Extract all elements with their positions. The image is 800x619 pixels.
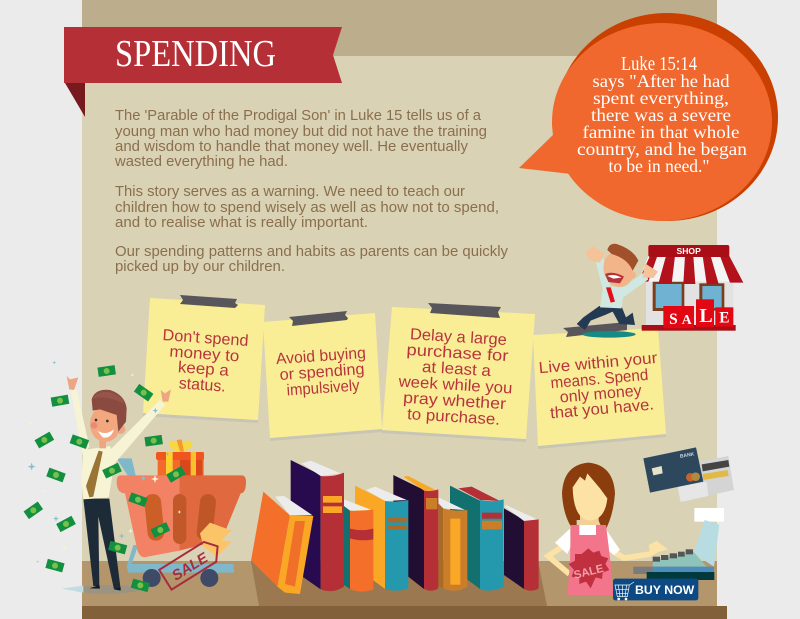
note 3 text: week while you [397, 373, 513, 397]
running man [577, 244, 658, 338]
note 3 text: at least a [422, 359, 492, 380]
note 4 text: that you have. [550, 396, 655, 422]
note 1 text: status. [178, 375, 226, 396]
note 4 text: Live within your [538, 350, 659, 377]
note 3 text: to purchase. [407, 406, 500, 429]
book: yellow and blue [355, 486, 408, 591]
shopping cart [117, 439, 246, 590]
sticky note 4 [533, 322, 666, 449]
text block: introduction: The 'Parable of the Prodigal Son' in Luke 15 tells us of a [115, 107, 482, 124]
credit cards: BANK [680, 451, 695, 460]
book: teal and orange [344, 499, 373, 592]
title: SPENDING [115, 33, 276, 75]
sale tag [159, 537, 224, 590]
verse text: to be in need." [608, 156, 710, 176]
sticky note 2 [263, 311, 382, 441]
text block: introduction: and wisdom to handle that money well. He eventually [115, 138, 468, 155]
verse text: famine in that whole [582, 122, 740, 142]
callout: Luke 15:14 speech bubble [519, 13, 778, 221]
book: navy and red [291, 460, 344, 591]
text block: introduction: and to realise what is really important. [115, 214, 368, 231]
text block: introduction: Our spending patterns and habits as parents can be quickly [115, 243, 508, 260]
shop: L [699, 305, 713, 327]
note 2 text [275, 345, 369, 400]
verse text: country, and he began [577, 139, 747, 159]
illustration: happy man with shopping cart [24, 361, 246, 594]
note 3 text [395, 326, 516, 429]
note 2 text: or spending [279, 361, 365, 384]
verse text: there was a severe [591, 105, 731, 125]
falling money [24, 365, 186, 592]
text block: introduction [114, 107, 508, 275]
note 2 text: Avoid buying [275, 345, 366, 368]
sparkles [28, 361, 181, 563]
note 1 text: keep a [177, 359, 229, 380]
buy now button [613, 579, 698, 600]
illustration: shop with running man [577, 244, 743, 338]
note 1 text: money to [169, 344, 240, 365]
text block: introduction: This story serves as a warning. We need to teach our [115, 183, 465, 200]
book: dark and red [393, 475, 438, 591]
book: teal and blue [450, 486, 504, 591]
buy now button: BUY NOW [635, 583, 695, 597]
shop: SHOP [676, 247, 702, 256]
cash register [633, 508, 724, 580]
note 4 text [538, 350, 663, 423]
book: dark and red small [504, 505, 539, 591]
note 4 text: only money [559, 382, 642, 407]
sticky note 1 [143, 295, 265, 423]
text block: introduction: children how to spend wisely as well as how not to spend, [115, 199, 499, 216]
text block: introduction: wasted everything he had. [114, 153, 288, 170]
shop [638, 245, 743, 331]
text block: introduction: young man who had money but did not have the training [115, 123, 487, 140]
book: leaning orange [251, 492, 313, 594]
note 3 text: purchase for [406, 342, 510, 365]
sale tag: SALE [169, 550, 212, 585]
note 3 text: pray whether [403, 390, 507, 413]
shop: S [669, 311, 678, 328]
man [62, 376, 171, 594]
verse text [577, 53, 747, 176]
note 2 text: impulsively [286, 377, 360, 399]
cashier [548, 463, 668, 595]
sticky note 3 [382, 303, 535, 442]
verse text: says "After he had [592, 71, 730, 91]
shop: A [682, 313, 692, 328]
verse text: spent everything, [593, 88, 729, 108]
note 1 text: Don't spend [162, 327, 249, 350]
illustration: cashier and register [548, 447, 734, 600]
shop: E [719, 310, 729, 327]
note 1 text [159, 327, 249, 397]
illustration: row of books [251, 460, 539, 594]
text block: introduction: picked up by our children. [115, 258, 285, 275]
cashier: SALE [573, 563, 605, 582]
note 4 text: means. Spend [550, 367, 649, 392]
verse text: Luke 15:14 [621, 53, 697, 75]
book: ochre [438, 497, 467, 591]
credit cards [643, 447, 734, 502]
note 3 text: Delay a large [409, 326, 507, 349]
title ribbon [64, 27, 342, 117]
